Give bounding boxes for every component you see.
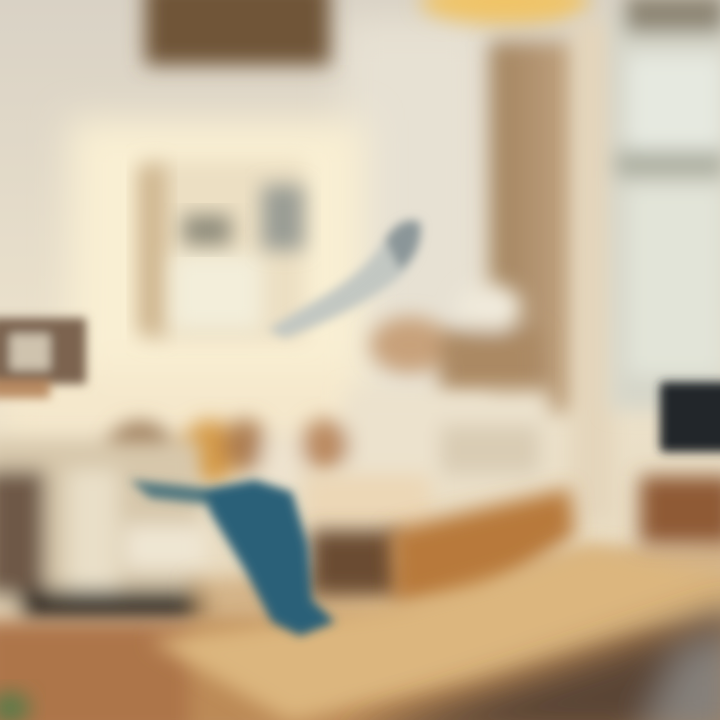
ceiling lamp xyxy=(420,0,590,24)
picture frame on wall xyxy=(138,160,305,340)
coffee table xyxy=(305,475,575,605)
wall glow xyxy=(0,120,365,440)
swoosh shape xyxy=(268,220,421,338)
curtain xyxy=(490,20,614,520)
window xyxy=(610,0,720,410)
dark floor reflection xyxy=(340,605,720,720)
cushions and sofa back xyxy=(108,390,550,490)
plant corner xyxy=(0,692,30,720)
television xyxy=(660,382,720,452)
sofa xyxy=(0,440,205,620)
plant and decor on right xyxy=(370,284,540,400)
rug xyxy=(150,545,720,720)
ceiling beam xyxy=(145,0,330,65)
wall shelf left xyxy=(0,318,86,398)
floor xyxy=(0,540,720,720)
tv stand xyxy=(640,476,720,544)
blue blanket xyxy=(130,480,335,636)
